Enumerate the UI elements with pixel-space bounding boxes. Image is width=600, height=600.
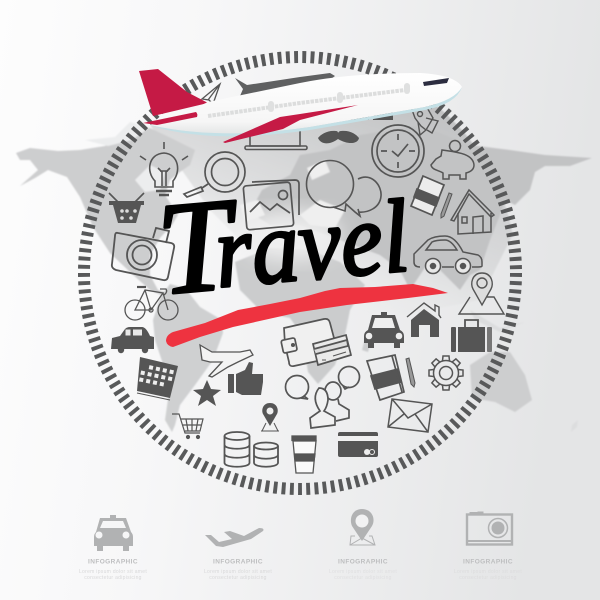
dashed ring xyxy=(84,57,516,489)
icon: taxi gray xyxy=(94,515,133,551)
plane: doors xyxy=(268,83,410,112)
icon: camera outline xyxy=(112,228,174,280)
map: light patches xyxy=(238,209,342,261)
icon: rocket xyxy=(411,104,438,135)
world map xyxy=(16,95,592,432)
icon: location pin on map xyxy=(459,273,504,314)
icon: shopping cart xyxy=(172,414,203,438)
map: eurasia xyxy=(250,125,592,290)
heading: INFOGRAPHIC xyxy=(88,558,138,566)
heading: INFOGRAPHIC xyxy=(338,558,388,566)
plane: far wing xyxy=(235,73,335,96)
bottom item 1: consectetur adipisicing xyxy=(84,575,142,581)
bottom item 1 xyxy=(79,515,147,581)
icon: lightbulb xyxy=(140,142,188,195)
map: madagascar xyxy=(362,330,374,352)
icon: magnifier xyxy=(184,152,245,197)
body text: Lorem ipsum dolor sit amet xyxy=(79,569,147,575)
icon: paper plane xyxy=(202,84,220,104)
body text: Lorem ipsum dolor sit amet xyxy=(204,569,272,575)
icon: map pin xyxy=(261,403,279,431)
title xyxy=(152,169,413,323)
icon: pin gray xyxy=(350,509,375,545)
icon: taxi xyxy=(364,312,404,348)
icon: notebook bottom xyxy=(367,355,404,400)
bottom item 4: consectetur adipisicing xyxy=(459,575,517,581)
icon: people with speech bubbles xyxy=(286,366,360,428)
icon: clock xyxy=(372,125,424,177)
icon: star xyxy=(193,380,221,406)
plane: tail stabilizer xyxy=(143,112,197,125)
icon: camera gray xyxy=(467,512,512,544)
icon: outlined car xyxy=(414,236,482,274)
title: T xyxy=(152,169,246,323)
map: arctic islands xyxy=(85,122,165,192)
plane: tail fin xyxy=(139,69,208,116)
icon: envelope xyxy=(388,399,432,432)
icon: piggy bank xyxy=(431,140,474,179)
icon: mustache xyxy=(318,131,359,143)
map: south america xyxy=(153,284,223,432)
plane: cockpit xyxy=(423,78,449,86)
icon: house outline xyxy=(451,190,494,234)
bottom item 2 xyxy=(204,528,272,581)
icon: airplane outline xyxy=(200,345,253,377)
icon: wallet xyxy=(281,319,334,366)
icon: solid credit card xyxy=(338,432,378,457)
icon: gear xyxy=(429,356,463,390)
icon: pencil bottom xyxy=(406,358,415,387)
bottom item 2: consectetur adipisicing xyxy=(209,575,267,581)
icon: photo frames xyxy=(243,180,299,230)
bottom item 4 xyxy=(454,512,522,581)
bottom item 3 xyxy=(329,509,397,581)
plane: windows xyxy=(208,90,405,116)
map: indonesia and new zealand xyxy=(470,310,578,432)
title: ravel xyxy=(210,178,413,310)
plane: near wing xyxy=(223,105,358,143)
brush stroke xyxy=(166,284,448,347)
icon: pencil top xyxy=(441,193,452,218)
body text: Lorem ipsum dolor sit amet xyxy=(329,569,397,575)
icon: outlined credit card xyxy=(313,335,351,365)
icon: bicycle xyxy=(125,287,178,320)
airplane xyxy=(139,69,462,143)
body text: Lorem ipsum dolor sit amet xyxy=(454,569,522,575)
map: north america xyxy=(16,128,195,300)
icon: basket xyxy=(109,193,144,223)
icon: notebook top xyxy=(411,176,444,215)
icon: solid house xyxy=(407,303,441,337)
map: africa xyxy=(235,248,365,384)
icon: coins xyxy=(224,432,278,467)
icon: laptop xyxy=(245,112,393,150)
icon: speech bubbles xyxy=(306,160,381,216)
icon: suitcase xyxy=(451,320,492,352)
heading: INFOGRAPHIC xyxy=(463,558,513,566)
icon: calendar xyxy=(137,357,178,400)
heading: INFOGRAPHIC xyxy=(213,558,263,566)
icon: coffee cup xyxy=(292,436,316,473)
plane: belly stripe xyxy=(150,87,462,136)
bottom item 3: consectetur adipisicing xyxy=(334,575,392,581)
plane: fuselage xyxy=(150,73,462,134)
map: australia xyxy=(470,352,532,412)
icon: thumbs up xyxy=(228,362,263,395)
icon: plane gray xyxy=(205,528,264,547)
icon: solid car xyxy=(111,327,154,353)
